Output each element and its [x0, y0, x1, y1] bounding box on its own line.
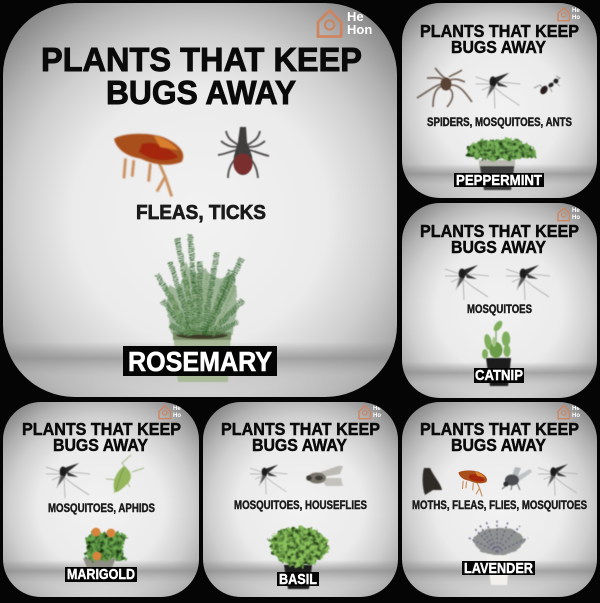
pot: lavender	[486, 554, 510, 585]
heading: peppermint panel: PLANTS THAT KEEP	[420, 21, 579, 41]
heading: rosemary panel: BUGS AWAY	[106, 74, 296, 111]
icon: tick	[218, 127, 269, 178]
icon: aphid	[106, 455, 144, 493]
heading: catnip panel: PLANTS THAT KEEP	[420, 221, 579, 241]
pot: peppermint	[479, 160, 515, 190]
heading: catnip panel: BUGS AWAY	[451, 237, 546, 257]
heading: peppermint panel	[420, 21, 579, 57]
pot: catnip	[486, 358, 511, 386]
panel: rosemary	[3, 3, 397, 397]
plant: rosemary	[157, 234, 243, 382]
caption: mosquitoes: MOSQUITOES	[467, 304, 532, 316]
caption: mosquitoes, houseflies: MOSQUITOES, HOUSEFLIES	[234, 500, 367, 512]
logo: rosemary panel: He	[347, 9, 364, 24]
heading: basil panel	[221, 419, 380, 455]
icon: mosquito left	[445, 265, 489, 300]
logo: lavender panel: Ho	[572, 413, 580, 419]
icon: mosquito	[476, 73, 520, 108]
panel: basil	[203, 402, 398, 597]
icon: mosquito	[250, 465, 287, 494]
heading: lavender panel	[420, 419, 579, 455]
plant: basil	[269, 527, 329, 589]
logo: basil panel: Ho	[373, 413, 381, 419]
icon: mosquito	[538, 464, 578, 496]
label: catnip: CATNIP	[475, 368, 523, 384]
logo: marigold panel: He	[173, 406, 181, 412]
logo: peppermint panel	[558, 8, 580, 21]
plant: lavender	[467, 520, 528, 585]
panel: peppermint	[402, 3, 597, 198]
icon: mosquito right	[506, 265, 550, 300]
heading: peppermint panel: BUGS AWAY	[451, 37, 546, 57]
logo: basil panel: He	[373, 406, 381, 412]
label: basil: BASIL	[279, 572, 317, 588]
pot: marigold	[83, 558, 116, 570]
logo: catnip panel	[558, 208, 580, 221]
icon: flea	[458, 471, 487, 496]
heading: catnip panel	[420, 221, 579, 257]
logo: basil panel	[359, 406, 381, 419]
logo: rosemary panel	[318, 9, 372, 37]
label: peppermint: PEPPERMINT	[456, 173, 542, 189]
pot: basil	[284, 565, 312, 589]
logo: catnip panel: Ho	[572, 215, 580, 221]
heading: basil panel: PLANTS THAT KEEP	[221, 419, 380, 439]
icon: fly	[502, 467, 532, 490]
label: marigold: MARIGOLD	[67, 567, 135, 583]
icon: spider	[417, 68, 472, 107]
icon: mosquito	[46, 463, 90, 498]
icon: ant	[534, 76, 560, 96]
caption: fleas, ticks: FLEAS, TICKS	[136, 201, 266, 224]
label: rosemary: ROSEMARY	[128, 346, 272, 377]
logo: rosemary panel: Hon	[347, 22, 372, 37]
label: lavender: LAVENDER	[464, 561, 533, 577]
icon: housefly	[306, 466, 343, 486]
panel: lavender	[402, 402, 597, 597]
icon: flea	[114, 134, 183, 196]
icon: moth	[423, 468, 442, 495]
logo: lavender panel	[558, 406, 580, 419]
heading: lavender panel: PLANTS THAT KEEP	[420, 419, 579, 439]
logo: peppermint panel: Ho	[572, 15, 580, 21]
plant: catnip	[482, 319, 511, 386]
logo: catnip panel: He	[572, 208, 580, 214]
plant: peppermint	[467, 139, 537, 190]
plant: marigold	[83, 528, 128, 570]
panel: catnip	[402, 203, 597, 398]
logo: lavender panel: He	[572, 406, 580, 412]
logo: marigold panel: Ho	[173, 413, 181, 419]
heading: basil panel: BUGS AWAY	[252, 435, 347, 455]
panel: marigold	[3, 402, 199, 597]
heading: rosemary panel: PLANTS THAT KEEP	[41, 41, 362, 78]
caption: mosquitoes, aphids: MOSQUITOES, APHIDS	[48, 503, 155, 515]
heading: marigold panel: BUGS AWAY	[53, 435, 148, 455]
heading: lavender panel: BUGS AWAY	[451, 435, 546, 455]
logo: marigold panel	[159, 406, 181, 419]
caption: spiders, mosquitoes, ants: SPIDERS, MOSQUITOES, ANTS	[427, 117, 572, 129]
pot: rosemary	[173, 331, 231, 382]
logo: peppermint panel: He	[572, 8, 580, 14]
heading: marigold panel: PLANTS THAT KEEP	[22, 419, 181, 439]
heading: rosemary panel	[41, 41, 362, 111]
heading: marigold panel	[22, 419, 181, 455]
